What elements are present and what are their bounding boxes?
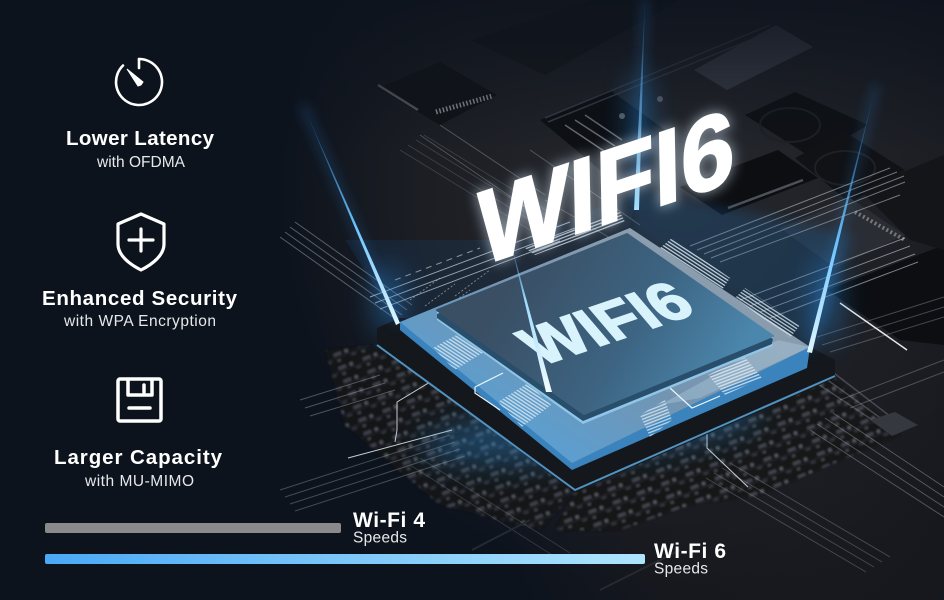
chip base (377, 318, 835, 492)
chip die (437, 236, 773, 424)
benefit: lower latency: with OFDMA (96, 154, 186, 171)
chip substrate (400, 228, 810, 470)
benefit: enhanced security: Enhanced Security (42, 287, 238, 310)
speed bar: Wi-Fi 6: Wi-Fi 6 (654, 540, 726, 563)
chip label WIFI6: WIFI6 (506, 271, 707, 377)
blue beam wash (345, 70, 855, 478)
speed bar: Wi-Fi 4: Wi-Fi 4 (353, 509, 425, 532)
circuit traces below the chip (280, 297, 944, 590)
board components: upper chips (378, 0, 944, 345)
speed bar: Wi-Fi 6: Speeds (654, 560, 708, 578)
light beams (303, 0, 876, 392)
floating WIFI6 headline: WIFI6 (477, 86, 735, 288)
benefit: enhanced security: with WPA Encryption (63, 313, 216, 330)
benefit: larger capacity (54, 379, 223, 490)
benefit: lower latency (66, 59, 215, 171)
benefit: lower latency: Lower Latency (66, 127, 215, 150)
icon: shield with plus (118, 214, 164, 270)
chip pins (433, 212, 800, 437)
chip package (377, 212, 835, 492)
white traces around the chip (280, 125, 918, 350)
speed bar: Wi-Fi 4 (45, 509, 425, 546)
speed bar: Wi-Fi 4: Speeds (353, 530, 407, 546)
benefit: larger capacity: Larger Capacity (54, 446, 223, 469)
benefit: enhanced security (42, 214, 238, 330)
speed bar: Wi-Fi 6 (45, 540, 726, 578)
icon: stopwatch gauge (116, 59, 162, 105)
floating WIFI6 headline: WIFI6 (477, 86, 735, 288)
benefit: larger capacity: with MU-MIMO (84, 473, 194, 490)
icon: floppy disk (118, 379, 161, 421)
